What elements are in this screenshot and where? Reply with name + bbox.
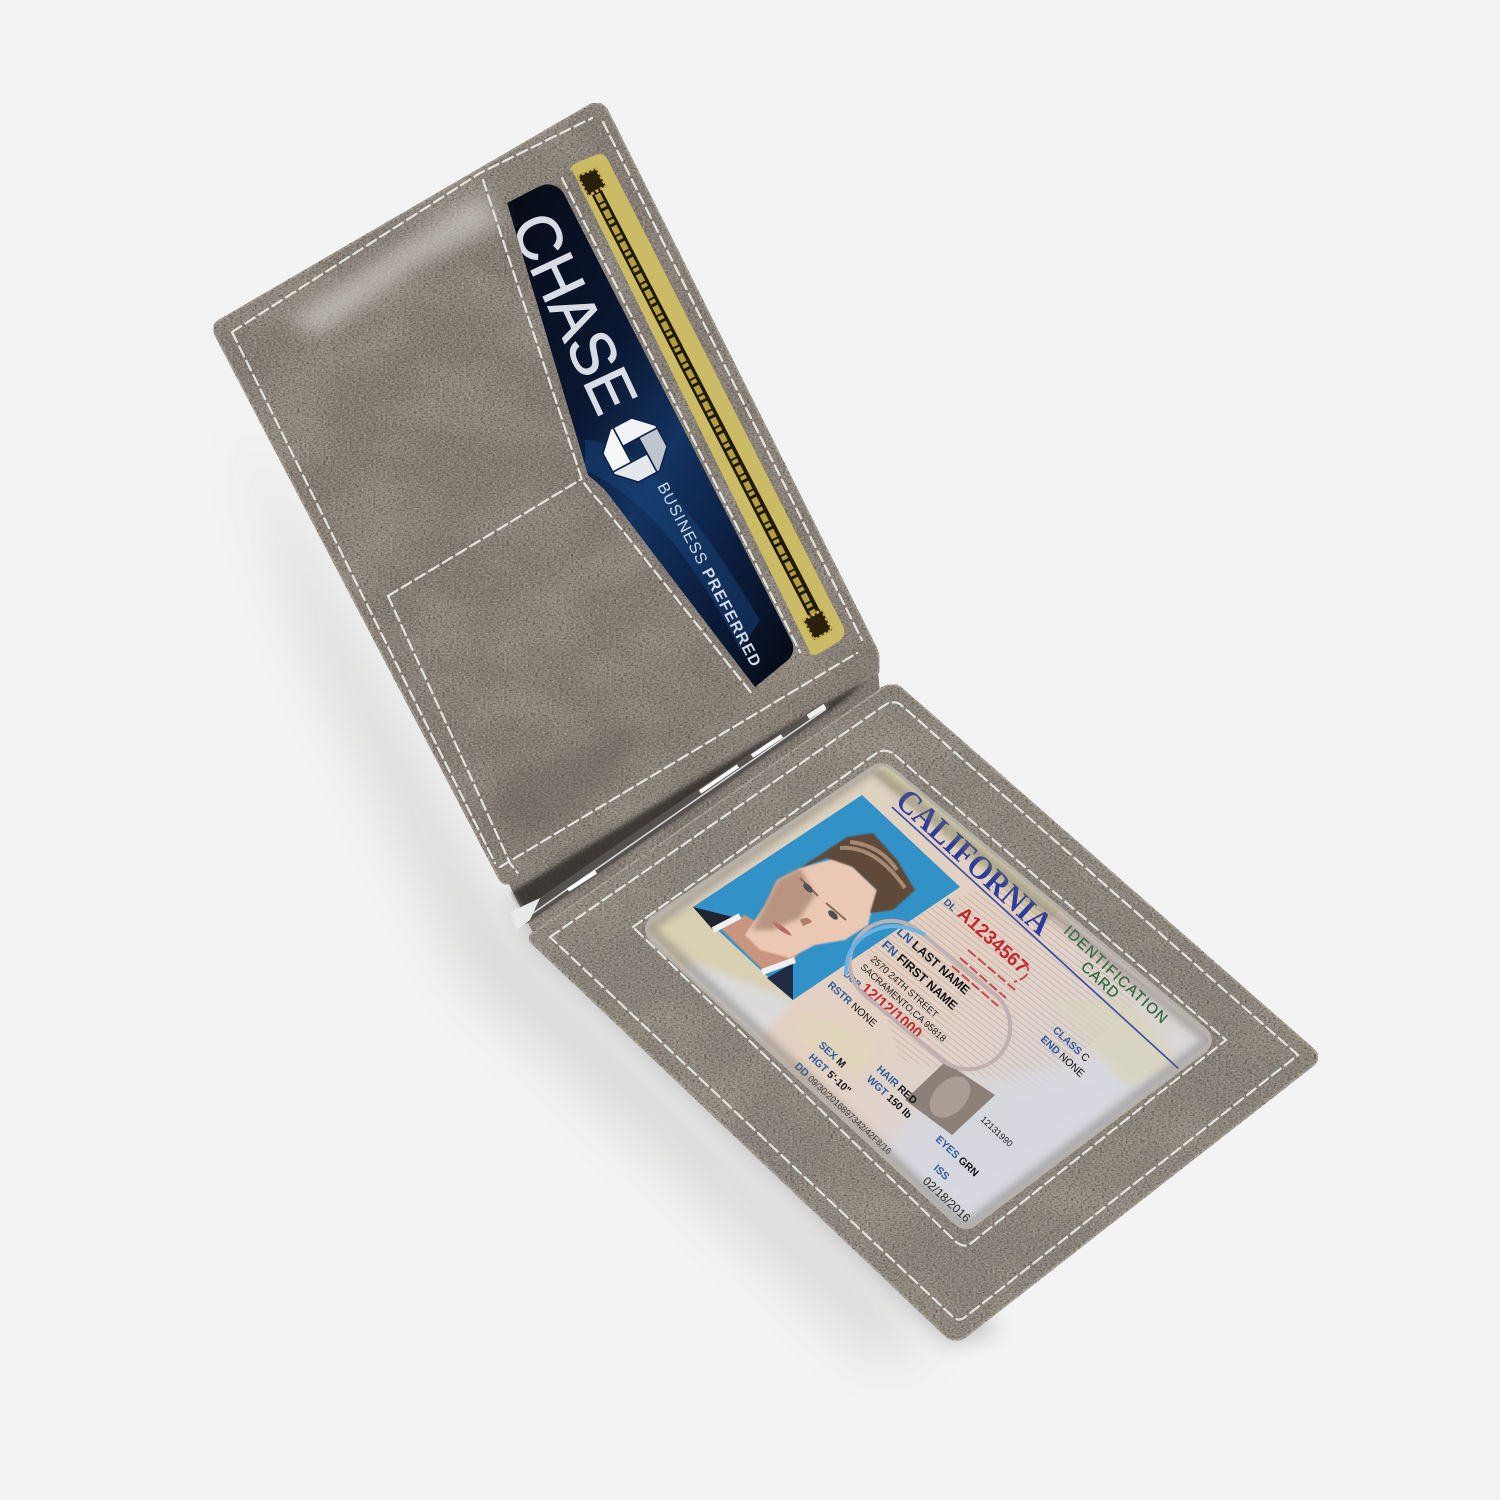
upper wallet panel <box>214 103 879 884</box>
card corner ornament top <box>577 168 606 196</box>
window inner shadow <box>648 768 1210 1228</box>
hair <box>800 833 915 913</box>
money clip <box>507 673 880 937</box>
icon: ID window and card <box>648 766 1208 1226</box>
icon: ID window and card: END NONE <box>1038 1033 1087 1080</box>
icon: ID window and card: 02/18/2016 <box>920 1174 974 1225</box>
panel: leather back <box>214 103 879 884</box>
wallet shadow <box>240 420 1000 1360</box>
clip end <box>510 898 540 930</box>
card corner ornament bottom <box>803 610 832 640</box>
suit right <box>767 963 793 1000</box>
panel: card slot strip <box>552 170 810 664</box>
dl number: DL A1234567 <box>940 891 1032 978</box>
hologram blue arc <box>846 926 925 975</box>
state name: CALIFORNIA <box>889 782 1059 943</box>
signature in red <box>952 950 1028 1006</box>
icon: ID window and card: CARD <box>1077 958 1123 1003</box>
icon: ID window and card: FN FIRST NAME <box>879 938 960 1013</box>
collar <box>713 916 795 972</box>
ID card background <box>648 766 1208 1226</box>
window bevel <box>648 767 1208 1226</box>
face <box>745 857 877 958</box>
icon: ID window and card: 12131990 <box>979 1114 1015 1149</box>
identification card heading: IDENTIFICATION <box>1060 922 1171 1027</box>
icon: ID window and card: HGT 5'-10" <box>806 1051 853 1097</box>
icon: ID window and card: 2570 24TH STREET <box>868 954 940 1021</box>
microprint lines <box>860 880 1150 1090</box>
white lower wash <box>890 1054 1122 1211</box>
suit left <box>693 907 732 930</box>
highlight on pocket <box>285 190 500 335</box>
BUSINESS PREFERRED text: BUSINESS PREFERRED <box>653 480 763 670</box>
icon: ID window and card: ISS <box>931 1162 952 1183</box>
photo backdrop <box>693 795 960 1000</box>
icon: Chase card <box>497 184 793 687</box>
name and address: LN LAST NAME <box>894 925 973 998</box>
icon: ID window and card: HAIR RED <box>874 1063 920 1107</box>
date of birth: DOB 12/12/1000 <box>840 965 925 1042</box>
icon: ID window and card: CLASS C <box>1050 1024 1092 1065</box>
restriction: RSTR NONE <box>825 979 879 1030</box>
state underline <box>892 807 1180 1070</box>
card swoosh <box>585 440 760 650</box>
icon: ID window and card: DD 09/30/2016897342/42F8/16 <box>792 1060 894 1157</box>
clip bar <box>516 703 829 924</box>
clip highlights <box>526 706 826 918</box>
beige left area <box>650 907 792 1002</box>
biometric fields: SEX M <box>816 1039 848 1071</box>
fold leather <box>507 673 880 937</box>
icon: ID window and card: SACRAMENTO,CA 95818 <box>858 962 948 1045</box>
fold shadow <box>512 680 866 920</box>
panel: leather front <box>529 685 1318 1340</box>
neck <box>720 915 800 970</box>
CHASE wordmark: CHASE <box>497 202 650 424</box>
beige top of card <box>875 765 1060 925</box>
dark patch above fold <box>490 720 650 850</box>
small ghost photo <box>905 1062 995 1135</box>
icon: gold card <box>570 154 844 655</box>
icon: ID window and card: WGT 150 lb <box>864 1073 914 1121</box>
panel: front pocket <box>232 190 755 865</box>
face shadow <box>752 868 815 930</box>
stitching: upper panel <box>232 118 862 880</box>
stitching: lower panel <box>550 702 1298 1320</box>
hologram loop <box>848 918 1012 1071</box>
icon: ID window and card: EYES GRN <box>933 1133 981 1179</box>
icon: Chase octagon logo <box>594 409 676 491</box>
lower wallet panel <box>529 685 1318 1340</box>
